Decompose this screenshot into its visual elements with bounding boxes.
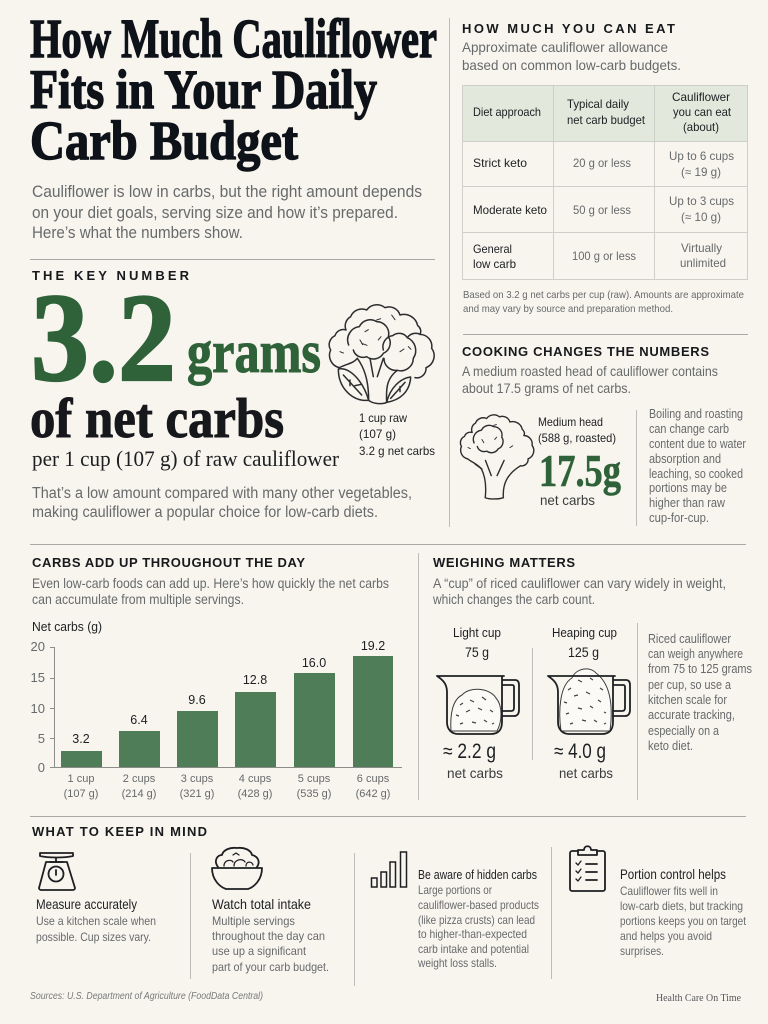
light cup comparison — [437, 625, 519, 781]
heading: cooking changes the numbers: COOKING CHANGES THE NUMBERS — [462, 344, 709, 359]
tip: hidden carbs: (like pizza crusts) can lead — [418, 913, 535, 927]
bar chart: 20 — [31, 639, 45, 654]
bar chart: 5 — [38, 731, 45, 746]
bar chart: (535 g) — [297, 788, 331, 800]
allowance table: Cauliflower — [672, 90, 730, 104]
stat: 17.5 g net carbs — [539, 445, 621, 508]
tip: portion control: surprises. — [620, 944, 664, 958]
medium head label: Medium head — [538, 415, 603, 429]
tip: portion control: low-carb diets, but tracking — [620, 899, 743, 913]
panel: weighing matters — [432, 555, 752, 800]
allowance table: low carb — [473, 257, 516, 271]
tip: measure accurately: possible. Cup sizes vary. — [36, 930, 151, 944]
bar chart: 4 cups — [239, 773, 272, 785]
cooking intro text — [462, 363, 718, 396]
allowance table: (≈ 19 g) — [681, 165, 721, 179]
allowance table: you can eat — [673, 105, 732, 119]
bar chart: (107 g) — [64, 788, 98, 800]
weighing intro text: A “cup” of riced cauliflower can vary widely in weight, — [433, 575, 726, 591]
cauliflower caption: 1 cup raw — [359, 411, 407, 425]
tip: hidden carbs: cauliflower-based products — [418, 898, 539, 912]
allowance table: General — [473, 242, 512, 256]
bar chart: 12.8 — [243, 673, 267, 687]
medium head label — [538, 415, 616, 445]
icon: cauliflower — [329, 305, 434, 404]
tip: portion control — [570, 846, 747, 958]
panel: the key number — [30, 268, 435, 521]
allowance table: Typical daily — [567, 97, 629, 111]
title: Carb Budget — [30, 110, 299, 171]
bar chart: 10 — [31, 701, 45, 716]
tip: watch total intake — [212, 848, 329, 974]
tip: watch total intake: Multiple servings — [212, 914, 295, 928]
bar chart: 15 — [31, 670, 45, 685]
icon: rising bars — [372, 852, 406, 887]
cooking side note: can change carb — [649, 422, 729, 436]
chart intro text: Even low-carb foods can add up. Here’s how quickly the net carbs — [32, 575, 389, 591]
allowance table: Up to 6 cups — [669, 149, 734, 163]
bar chart: 19.2 — [361, 639, 385, 653]
bar chart: 6.4 — [130, 713, 148, 727]
allowance table — [462, 85, 748, 280]
cooking side note: Boiling and roasting — [649, 407, 743, 421]
big number 3.2 grams: 3.2 — [31, 269, 176, 408]
cooking side note: cup-for-cup. — [649, 511, 709, 525]
cauliflower caption — [359, 411, 435, 458]
weighing side note: from 75 to 125 grams — [648, 662, 752, 676]
bar chart: 0 — [38, 760, 45, 775]
weighing side note: can weigh anywhere — [648, 647, 743, 661]
key number explanation: making cauliflower a popular choice for low-carb diets. — [32, 504, 378, 521]
table intro text: based on common low-carb budgets. — [462, 57, 681, 73]
cooking side note: higher than raw — [649, 496, 726, 510]
sources footnote: Sources: U.S. Department of Agriculture (FoodData Central) — [30, 991, 263, 1002]
cauliflower caption: (107 g) — [359, 427, 396, 441]
heading: what to keep in mind: WHAT TO KEEP IN MIND — [32, 824, 207, 839]
tip: watch total intake: Watch total intake — [212, 896, 311, 912]
tip: portion control: Cauliflower fits well in — [620, 884, 718, 898]
per cup subtitle: per 1 cup (107 g) of raw cauliflower — [32, 446, 340, 471]
bar chart: 3.2 — [72, 732, 90, 746]
tip: watch total intake: throughout the day can — [212, 929, 325, 943]
allowance table: Strict keto — [473, 156, 527, 170]
tip: hidden carbs: Be aware of hidden carbs — [418, 868, 537, 882]
big number 3.2 grams: grams — [187, 319, 321, 385]
allowance table: 20 g or less — [573, 156, 631, 170]
title — [30, 8, 437, 171]
intro text: Here’s what the numbers show. — [32, 223, 243, 242]
bar chart: (321 g) — [180, 788, 214, 800]
heaping cup comparison: net carbs — [559, 765, 613, 781]
weighing intro text: which changes the carb count. — [432, 591, 595, 607]
chart intro text — [32, 575, 389, 607]
tip: measure accurately: Measure accurately — [36, 896, 137, 912]
table footnote: and may vary by source and preparation method. — [463, 303, 673, 315]
icon: kitchen scale — [39, 853, 75, 890]
bar chart: (642 g) — [356, 788, 390, 800]
allowance table: Diet approach — [473, 105, 541, 119]
big number 3.2 grams — [31, 269, 321, 408]
cooking side note: absorption and — [649, 452, 721, 466]
weighing side note: kitchen scale for — [648, 693, 727, 707]
publisher credit: Health Care On Time — [656, 992, 741, 1004]
weighing side note: Riced cauliflower — [648, 632, 731, 646]
icon: roasted cauliflower head — [460, 415, 534, 499]
allowance table: (about) — [683, 120, 719, 134]
stat: 17.5 g net carbs: net carbs — [540, 492, 595, 508]
light cup comparison: 75 g — [465, 644, 489, 660]
chart intro text: can accumulate from multiple servings. — [32, 591, 244, 607]
allowance table: Up to 3 cups — [669, 194, 734, 208]
panel: cooking changes the numbers — [460, 344, 746, 526]
stat: 17.5 g net carbs: 17.5g — [539, 445, 621, 496]
tip: portion control: Portion control helps — [620, 866, 726, 882]
tip: portion control: and helps you avoid — [620, 929, 712, 943]
title: How Much Cauliflower — [30, 8, 437, 69]
key number explanation — [32, 485, 412, 521]
bar chart — [31, 619, 402, 800]
light cup comparison: Light cup — [453, 625, 501, 640]
heading: the key number: THE KEY NUMBER — [32, 268, 190, 283]
weighing side note: per cup, so use a — [648, 678, 731, 692]
intro text: Cauliflower is low in carbs, but the right amount depends — [32, 182, 422, 201]
medium head label: (588 g, roasted) — [538, 431, 616, 445]
bar chart: 16.0 — [302, 656, 326, 670]
heading: weighing matters: WEIGHING MATTERS — [433, 555, 575, 570]
panel: what to keep in mind — [32, 824, 747, 986]
heading: how much you can eat: HOW MUCH YOU CAN EAT — [462, 21, 675, 36]
heading: carbs add up: CARBS ADD UP THROUGHOUT THE DAY — [32, 555, 305, 570]
allowance table: net carb budget — [567, 113, 646, 127]
heaping cup comparison — [548, 625, 630, 781]
panel: carbs add up — [31, 555, 402, 800]
bar chart: 1 cup — [68, 773, 94, 785]
cooking side note: portions may be — [649, 481, 727, 495]
weighing side note: accurate tracking, — [648, 708, 735, 722]
tip: hidden carbs: to higher-than-expected — [418, 927, 527, 941]
bar chart: 2 cups — [123, 773, 156, 785]
intro text — [32, 182, 422, 242]
tip: portion control: portions keeps you on target — [620, 914, 747, 928]
tip: hidden carbs — [372, 852, 539, 970]
allowance table: (≈ 10 g) — [681, 210, 721, 224]
bar chart: 5 cups — [298, 773, 331, 785]
tip: hidden carbs: weight loss stalls. — [417, 956, 497, 970]
allowance table: unlimited — [680, 256, 726, 270]
table footnote — [463, 289, 744, 315]
table footnote: Based on 3.2 g net carbs per cup (raw). Amounts are approximate — [463, 289, 744, 301]
light cup comparison: net carbs — [447, 765, 503, 781]
icon: measuring cup, heaping — [548, 669, 630, 734]
tip: hidden carbs: Large portions or — [418, 883, 492, 897]
key number explanation: That’s a low amount compared with many other vegetables, — [32, 485, 412, 502]
icon: clipboard checklist — [570, 846, 605, 891]
table intro text — [462, 39, 681, 73]
bar chart: Net carbs (g) — [32, 619, 102, 634]
tip: measure accurately — [36, 853, 156, 944]
tip: measure accurately: Use a kitchen scale when — [36, 914, 156, 928]
weighing side note — [648, 632, 752, 753]
bar chart: 3 cups — [181, 773, 214, 785]
bar chart: (428 g) — [238, 788, 272, 800]
tip: watch total intake: part of your carb budget. — [212, 960, 329, 974]
heaping cup comparison: ≈ 4.0 g — [554, 740, 606, 763]
icon: measuring cup, light — [437, 676, 519, 734]
of net carbs: of net carbs — [30, 388, 284, 450]
intro text: on your diet goals, serving size and how it’s prepared. — [32, 203, 398, 222]
allowance table: Moderate keto — [473, 203, 547, 217]
tip: hidden carbs: carb intake and potential — [418, 942, 529, 956]
icon: bowl of cauliflower — [212, 848, 262, 889]
cooking side note: leaching, so cooked — [649, 467, 743, 481]
table intro text: Approximate cauliflower allowance — [462, 39, 668, 55]
cooking intro text: about 17.5 grams of net carbs. — [462, 380, 631, 396]
heaping cup comparison: Heaping cup — [552, 625, 617, 640]
allowance table: Virtually — [681, 241, 722, 255]
allowance table: 50 g or less — [573, 203, 631, 217]
cooking side note — [649, 407, 746, 525]
title: Fits in Your Daily — [30, 59, 377, 120]
cooking intro text: A medium roasted head of cauliflower contains — [462, 363, 718, 379]
bar chart: (214 g) — [122, 788, 156, 800]
weighing side note: keto diet. — [648, 739, 693, 753]
light cup comparison: ≈ 2.2 g — [443, 740, 496, 763]
weighing side note: especially on a — [648, 724, 719, 738]
tip: watch total intake: use up a significant — [212, 944, 307, 958]
panel: how much you can eat — [462, 21, 748, 315]
heaping cup comparison: 125 g — [568, 644, 599, 660]
bar chart: 9.6 — [188, 693, 206, 707]
weighing intro text — [432, 575, 726, 607]
bar chart: 6 cups — [357, 773, 390, 785]
allowance table: 100 g or less — [572, 249, 636, 263]
cooking side note: content due to water — [649, 437, 746, 451]
cauliflower caption: 3.2 g net carbs — [359, 444, 435, 458]
